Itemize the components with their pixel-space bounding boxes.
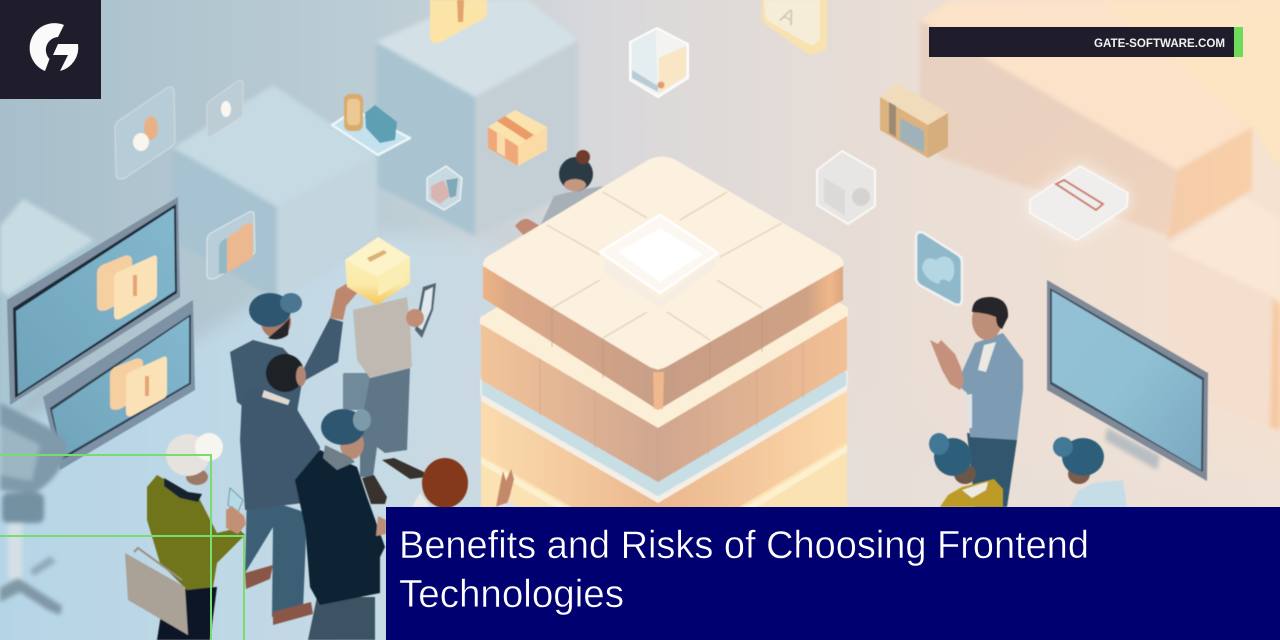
bar: website label	[929, 27, 1243, 57]
peach cubes: right	[920, 0, 1280, 430]
icon: coins on tray	[332, 94, 410, 155]
person: woman with red hair	[412, 458, 515, 508]
person: capped man, yellow jacket	[929, 433, 1003, 507]
layer 1 sides	[483, 263, 843, 410]
person: holding yellow box	[343, 283, 436, 504]
layer 4	[481, 345, 847, 568]
icon: orange box	[488, 110, 547, 166]
icon: document cube	[817, 151, 875, 224]
monitor: upper	[7, 197, 180, 405]
cube: left	[173, 85, 377, 300]
icon: stacked tile A: A	[777, 4, 799, 30]
person: capped man, white shirt	[1053, 437, 1127, 507]
icon: folders on lower monitor	[110, 356, 167, 416]
person: white hard hat, olive jacket	[125, 433, 246, 640]
decorative green frame lines	[0, 455, 244, 640]
cube: far left	[0, 199, 94, 420]
centre tray	[600, 215, 718, 308]
icon: blue tile	[916, 232, 962, 305]
monitor: lower	[43, 300, 195, 470]
icon: stacked tile A	[762, 0, 827, 56]
monitor: right	[1047, 280, 1208, 481]
icon: glass cube	[427, 166, 462, 210]
icon: packed box	[880, 83, 948, 158]
monitors: left pair	[7, 197, 195, 470]
person behind stack	[515, 150, 604, 238]
icon: cube on top box	[430, 0, 487, 43]
icon: small glass card	[207, 80, 243, 137]
person: dark hair, slate suit	[240, 354, 320, 625]
person: navy jacket, teal cap	[295, 409, 386, 640]
icon: glass folder	[207, 211, 255, 279]
person: capped man with raised arm	[230, 284, 358, 442]
title panel	[386, 507, 1280, 640]
central stacked block	[481, 156, 847, 568]
monitor stand	[1105, 428, 1160, 470]
icon: white device	[1030, 163, 1128, 240]
logo	[0, 0, 101, 99]
bar: website label: GATE-SOFTWARE.COM	[1094, 38, 1225, 50]
icon: book pages	[630, 28, 688, 97]
layer 3	[481, 270, 847, 556]
title: Benefits and Risks of Choosing Frontend	[399, 524, 1089, 567]
title: Technologies	[399, 573, 624, 616]
floating icons: left and top	[115, 0, 1128, 305]
cube: top centre	[376, 0, 578, 236]
pale blue cubes	[0, 0, 1280, 430]
camera on tripod	[0, 403, 67, 615]
layer 1 top	[483, 156, 843, 369]
icon: folders on upper monitor	[97, 255, 157, 320]
icon: yellow box held up	[345, 237, 410, 305]
layer 2	[481, 210, 847, 482]
person: man clapping, right	[930, 297, 1023, 507]
icon: glass card with circles	[115, 87, 175, 179]
